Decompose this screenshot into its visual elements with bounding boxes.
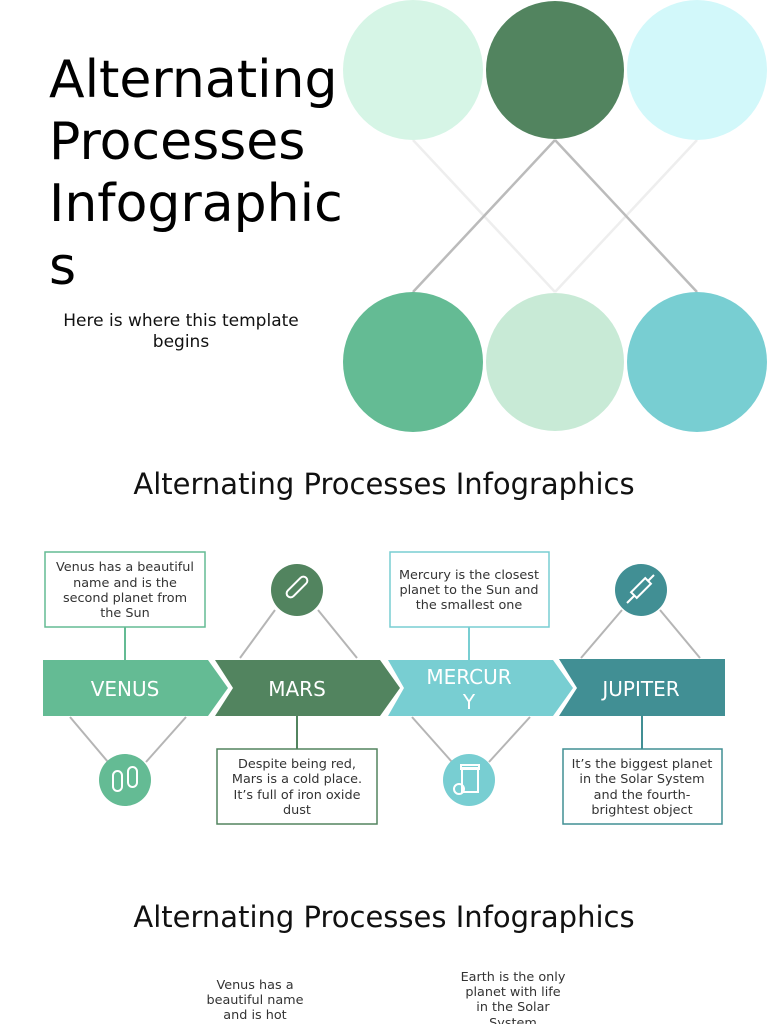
box: Mercury: planet to the Sun and: [399, 583, 539, 598]
box: Mercury: the smallest one: [416, 598, 522, 613]
title: Processes: [49, 112, 305, 172]
arrow: MARS: MARS: [268, 677, 326, 701]
process connectors: [70, 610, 700, 762]
box: Venus: [45, 552, 205, 627]
box: Jupiter: It’s the biggest planet: [572, 757, 712, 772]
subtitle: [63, 311, 299, 352]
box: Mercury: Mercury is the closest: [399, 568, 539, 583]
subtitle: Here is where this template: [63, 311, 299, 331]
arrow: VENUS: VENUS: [91, 677, 159, 701]
box: Mars: Mars is a cold place.: [232, 772, 362, 787]
circles grid: [343, 0, 767, 432]
title: s: [49, 237, 76, 297]
connector lines top: [413, 140, 697, 292]
box: Venus: name and is the: [73, 576, 177, 591]
box: Mars: dust: [283, 803, 311, 818]
box: Jupiter: [563, 749, 722, 824]
section heading 2: Alternating Processes Infographics: [133, 900, 635, 934]
text: venus bottom: beautiful name: [206, 993, 304, 1008]
text: earth bottom: [461, 970, 566, 1024]
text: venus bottom: and is hot: [223, 1008, 287, 1023]
title: Infographic: [49, 174, 343, 234]
arrow: MERCURY: [388, 660, 573, 716]
arrow: VENUS: [43, 660, 228, 716]
arrow: MARS: [215, 660, 400, 716]
subtitle: begins: [153, 332, 209, 352]
title: Alternating: [49, 50, 338, 110]
arrow: MERCURY: Y: [462, 690, 476, 714]
icon: test tube: [271, 564, 323, 616]
icon: pill bottle: [443, 754, 495, 806]
arrow: MERCURY: MERCUR: [426, 665, 512, 689]
arrow: JUPITER: [559, 659, 725, 716]
arrow: JUPITER: JUPITER: [600, 677, 680, 701]
box: Mercury: [390, 552, 549, 627]
icon: syringe: [615, 564, 667, 616]
text: venus bottom: Venus has a: [216, 978, 294, 993]
box: Jupiter: brightest object: [591, 803, 693, 818]
text: earth bottom: in the Solar: [476, 1000, 550, 1015]
text: earth bottom: planet with life: [465, 985, 561, 1000]
box: Mars: It’s full of iron oxide: [234, 788, 361, 803]
box: Venus: Venus has a beautiful: [56, 560, 194, 575]
box: Mars: Despite being red,: [238, 757, 356, 772]
box: Mars: [217, 749, 377, 824]
box: Jupiter: in the Solar System: [579, 772, 705, 787]
icon: pills: [99, 754, 151, 806]
text: venus bottom: [206, 978, 304, 1023]
text: earth bottom: Earth is the only: [461, 970, 566, 985]
box: Venus: second planet from: [63, 591, 187, 606]
title: [49, 50, 343, 297]
box: Jupiter: and the fourth-: [594, 788, 690, 803]
section heading 1: Alternating Processes Infographics: [133, 467, 635, 501]
box: Venus: the Sun: [100, 606, 150, 621]
